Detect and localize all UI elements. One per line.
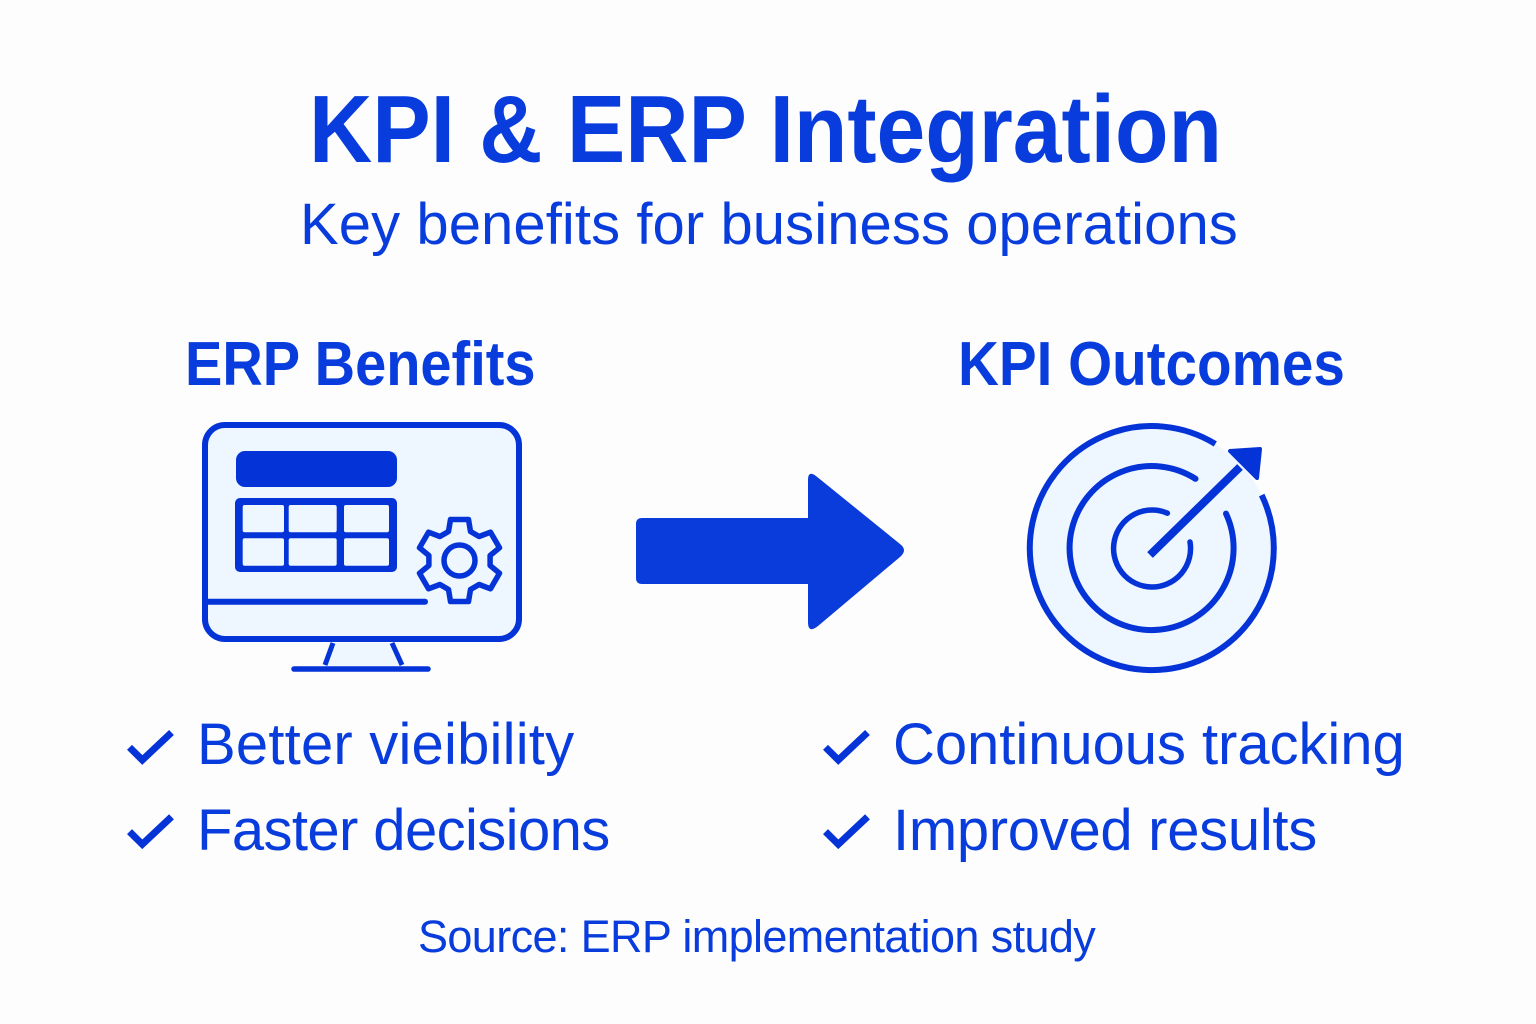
- heading: KPI Outcomes: KPI Outcomes: [958, 330, 1345, 398]
- list: ERP benefits: [127, 712, 610, 863]
- check and item: Improved results: Improved results: [893, 798, 1317, 863]
- heading: ERP Benefits: ERP Benefits: [185, 330, 536, 398]
- check and item: Better vieibility: Better vieibility: [197, 712, 574, 777]
- check and item: Faster decisions: Faster decisions: [197, 798, 610, 863]
- title: KPI & ERP Integration: [309, 76, 1222, 183]
- check and item: Continuous tracking: Continuous tracking: [893, 712, 1405, 777]
- icon: computer monitor with table and gear: [202, 422, 522, 672]
- source note: Source: ERP implementation study: [418, 911, 1095, 962]
- subtitle: Key benefits for business operations: [300, 192, 1238, 256]
- list: KPI outcomes: [823, 712, 1405, 863]
- arrow: ERP to KPI: [636, 474, 904, 630]
- icon: target with arrow: [1026, 423, 1277, 674]
